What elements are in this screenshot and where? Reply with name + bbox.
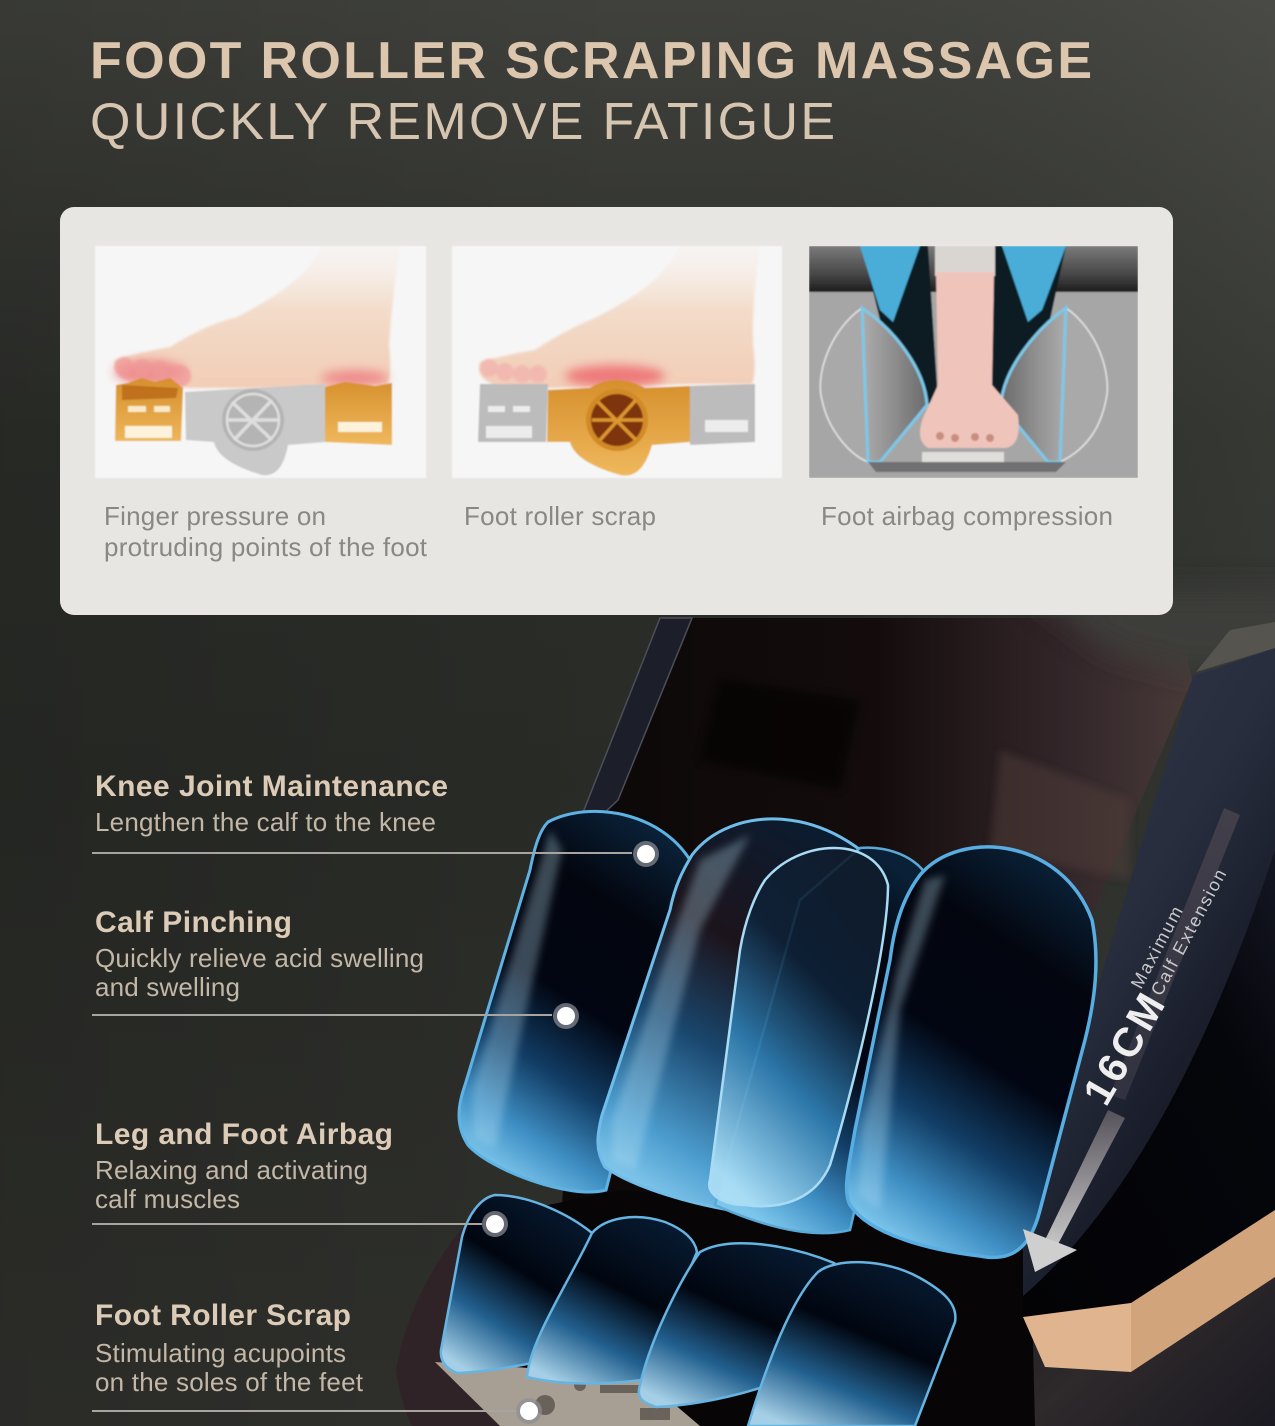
callout: leg and foot airbag: calf muscles <box>95 1184 240 1214</box>
callout: foot roller scrap <box>92 1299 542 1424</box>
caption: foot airbag compression: Foot airbag compression <box>821 501 1113 531</box>
panel: foot massage modes <box>60 207 1173 615</box>
callout: leg and foot airbag: Relaxing and activating <box>95 1155 368 1185</box>
chair back shading <box>700 680 1130 880</box>
caption: finger pressure: Finger pressure on <box>104 501 326 531</box>
title: FOOT ROLLER SCRAPING MASSAGE <box>90 32 1092 90</box>
chair frame strip <box>582 618 692 830</box>
airbag left highlights <box>472 830 945 1210</box>
caption: finger pressure <box>104 501 428 562</box>
massage chair <box>396 590 1275 1426</box>
airbag: calf D <box>847 847 1096 1257</box>
airbag: back fold <box>715 848 930 1233</box>
extension track <box>1110 808 1240 1100</box>
lower airbag: H <box>748 1262 955 1426</box>
airbag: calf B <box>596 817 859 1211</box>
headrest edge <box>1196 622 1275 672</box>
callout: calf pinching: and swelling <box>95 972 240 1002</box>
image: finger pressure <box>95 246 426 478</box>
gold band <box>1023 1210 1275 1372</box>
caption: finger pressure: protruding points of the foot <box>104 532 428 562</box>
callout: knee joint maintenance: Lengthen the calf to the knee <box>95 807 436 837</box>
airbag: calf C front <box>709 848 888 1206</box>
title: QUICKLY REMOVE FATIGUE <box>90 93 835 151</box>
title <box>90 32 1092 151</box>
callout: calf pinching: Calf Pinching <box>95 906 292 939</box>
callout: foot roller scrap: Stimulating acupoints <box>95 1338 346 1368</box>
callout: calf pinching <box>92 906 579 1029</box>
callout: calf pinching: Quickly relieve acid swelling <box>95 943 424 973</box>
callout: leg and foot airbag <box>92 1118 508 1237</box>
side panel black <box>1023 850 1275 1317</box>
arrow: 16cm <box>1023 1110 1125 1272</box>
label: maximum calf extension: Calf Extension <box>1147 866 1230 999</box>
callout: foot roller scrap: on the soles of the feet <box>95 1367 364 1397</box>
lower airbag: F <box>527 1217 697 1383</box>
lower left brown shell <box>396 1215 510 1426</box>
callout: leg and foot airbag: Leg and Foot Airbag <box>95 1118 393 1151</box>
foot mechanism <box>435 1362 700 1426</box>
top right fade <box>1062 594 1275 666</box>
callout: knee joint maintenance: Knee Joint Maintenance <box>95 770 448 803</box>
image: foot roller scrap <box>452 246 782 478</box>
lower airbag: E <box>441 1195 592 1373</box>
lower chair body <box>1023 1205 1275 1426</box>
chair back interior <box>560 618 1192 1250</box>
callout: knee joint maintenance <box>92 770 659 867</box>
airbag: calf A <box>459 811 690 1192</box>
label: maximum calf extension: Maximum <box>1127 903 1187 992</box>
callout: foot roller scrap: Foot Roller Scrap <box>95 1299 351 1332</box>
label: 16cm: 16CM <box>1074 986 1174 1112</box>
image: foot airbag compression <box>809 246 1138 478</box>
lower airbag: G <box>639 1243 834 1407</box>
lower foot rest shell <box>517 1201 1035 1426</box>
caption: foot roller scrap: Foot roller scrap <box>464 501 656 531</box>
side panel <box>1023 648 1275 1300</box>
